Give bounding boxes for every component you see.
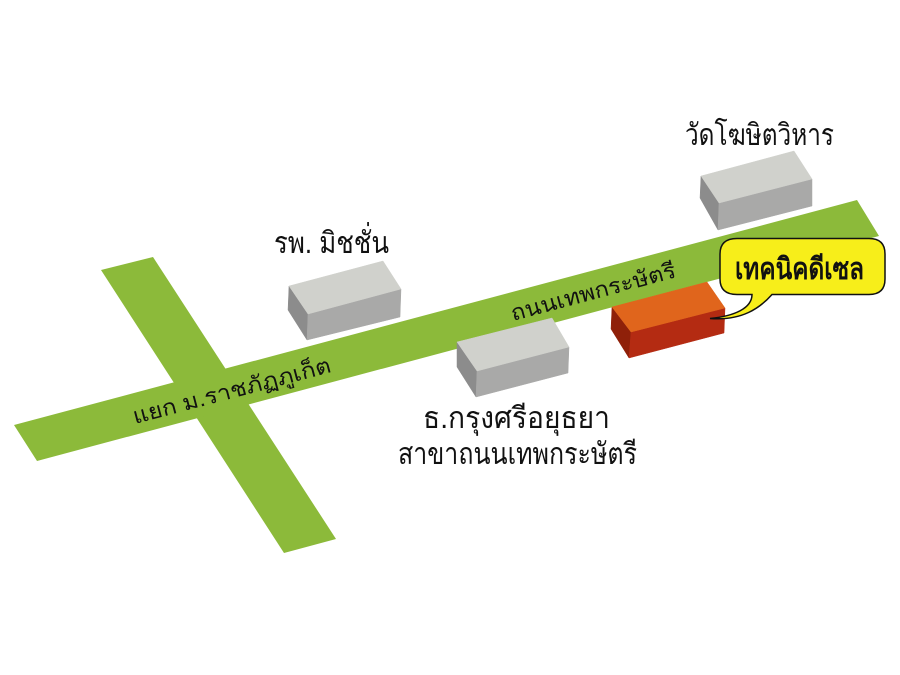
road label: Thepkasattri road: ถนนเทพกระษัตรี [508, 258, 679, 326]
road label: intersection: แยก ม.ราชภัฏภูเก็ต [129, 351, 334, 430]
cross road [101, 257, 336, 553]
label: temple: วัดโฆษิตวิหาร [685, 117, 834, 152]
building: bank [457, 318, 569, 397]
label: hospital: รพ. มิชชั่น [274, 222, 389, 260]
building: Technic Diesel (highlighted) [611, 282, 725, 358]
label: bank [398, 402, 637, 471]
label: bank: สาขาถนนเทพกระษัตรี [398, 438, 637, 471]
building: temple [700, 151, 812, 230]
callout: Technic Diesel [710, 238, 885, 319]
callout: Technic Diesel: เทคนิคดีเซล [735, 253, 864, 286]
label: bank: ธ.กรุงศรีอยุธยา [423, 402, 610, 437]
main road: Thepkasattri [14, 200, 879, 461]
building: hospital [288, 261, 401, 340]
